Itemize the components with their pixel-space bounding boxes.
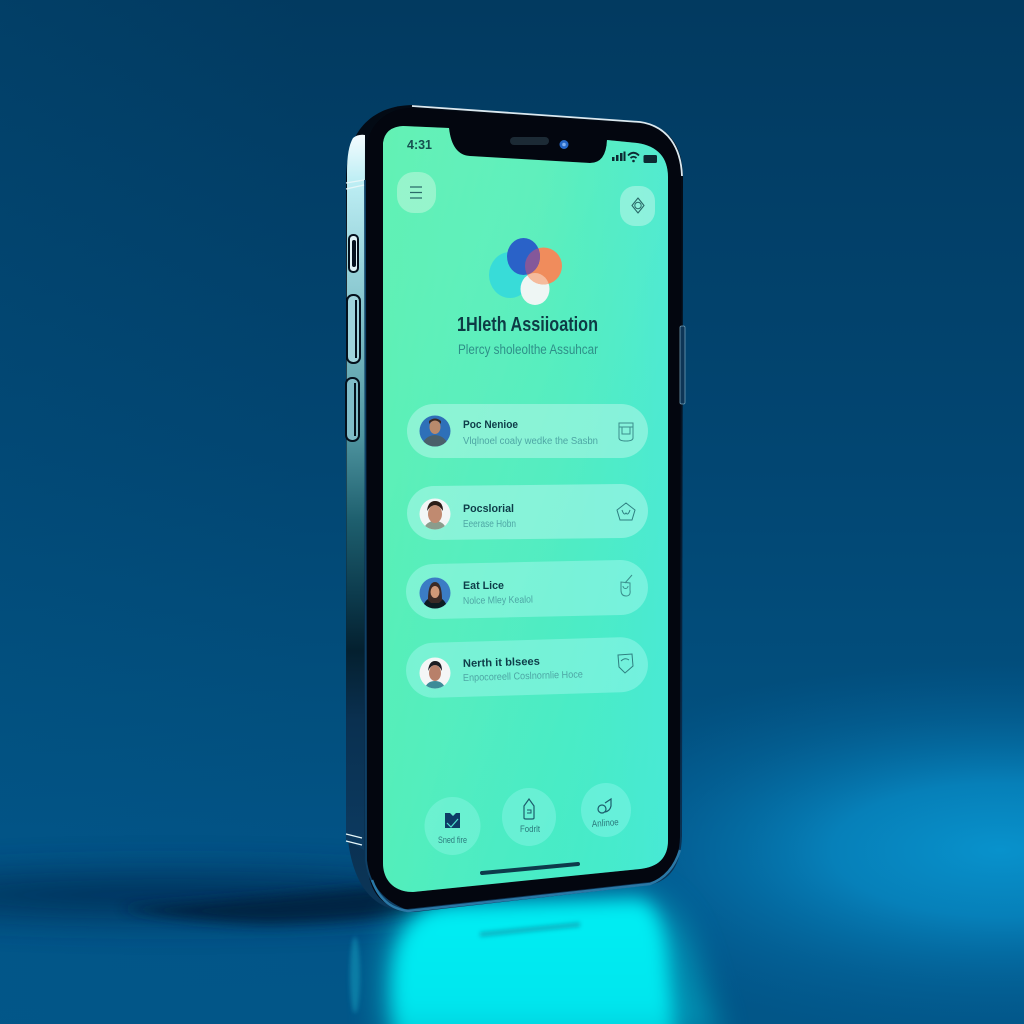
list item 3	[405, 559, 649, 620]
settings button	[620, 186, 655, 226]
list item 2: Eeerase Hobn	[463, 519, 516, 530]
title: 1Hleth Assiioation	[457, 314, 598, 336]
left antenna band	[346, 180, 364, 845]
black bezel	[366, 108, 681, 909]
logo: overlapping circles	[489, 238, 562, 305]
list item 4: Nerth it blsees	[463, 656, 540, 670]
icon: flask	[621, 575, 632, 596]
bottom nav button 3	[581, 783, 631, 837]
avatar 2	[420, 498, 450, 530]
status icons	[612, 152, 657, 163]
screen reflection on floor	[350, 893, 720, 1024]
icon: shield tag	[619, 423, 633, 441]
bottom nav button 1: Sned fire	[438, 835, 467, 846]
list item 4	[405, 636, 649, 699]
bottom nav button 2	[502, 788, 556, 846]
avatar 4	[420, 658, 450, 688]
status time: 4:31	[407, 138, 432, 152]
list item 2	[407, 484, 648, 540]
list item 1	[407, 404, 648, 458]
menu button	[397, 172, 436, 213]
list item 1: Vlqlnoel coaly wedke the Sasbn	[463, 436, 598, 447]
phone	[346, 105, 685, 912]
subtitle: Plercy sholeolthe Assuhcar	[458, 342, 598, 357]
list item 4: Enpocoreell Coslnornlie Hoce	[463, 669, 583, 684]
side button: mute	[349, 235, 358, 272]
icon: pentagon shield	[617, 503, 635, 520]
list item 1: Poc Nenioe	[463, 419, 518, 431]
bottom nav button 1	[424, 797, 480, 855]
avatar 1	[420, 416, 450, 446]
top edge highlight	[412, 106, 682, 176]
avatar 3	[420, 578, 450, 608]
screen	[383, 126, 668, 892]
icon: map pin	[618, 654, 633, 673]
speaker grille and camera	[510, 137, 568, 149]
list item 3: Eat Lice	[463, 580, 504, 592]
home indicator	[482, 864, 578, 873]
bottom nav button 3: Anlinoe	[591, 817, 619, 830]
dark rear body	[346, 105, 683, 912]
side button: volume down	[346, 378, 359, 441]
list item 2: Pocslorial	[463, 503, 514, 515]
floor shadow	[0, 875, 470, 924]
metal side frame	[346, 135, 365, 850]
inner side strip	[365, 180, 405, 910]
bottom edge highlight	[372, 850, 680, 911]
side button: volume up	[347, 295, 360, 363]
right edge strip	[680, 326, 685, 404]
bottom nav button 2: Fodrlt	[520, 824, 540, 835]
list item 3: Nolce Mley Kealol	[463, 595, 533, 607]
